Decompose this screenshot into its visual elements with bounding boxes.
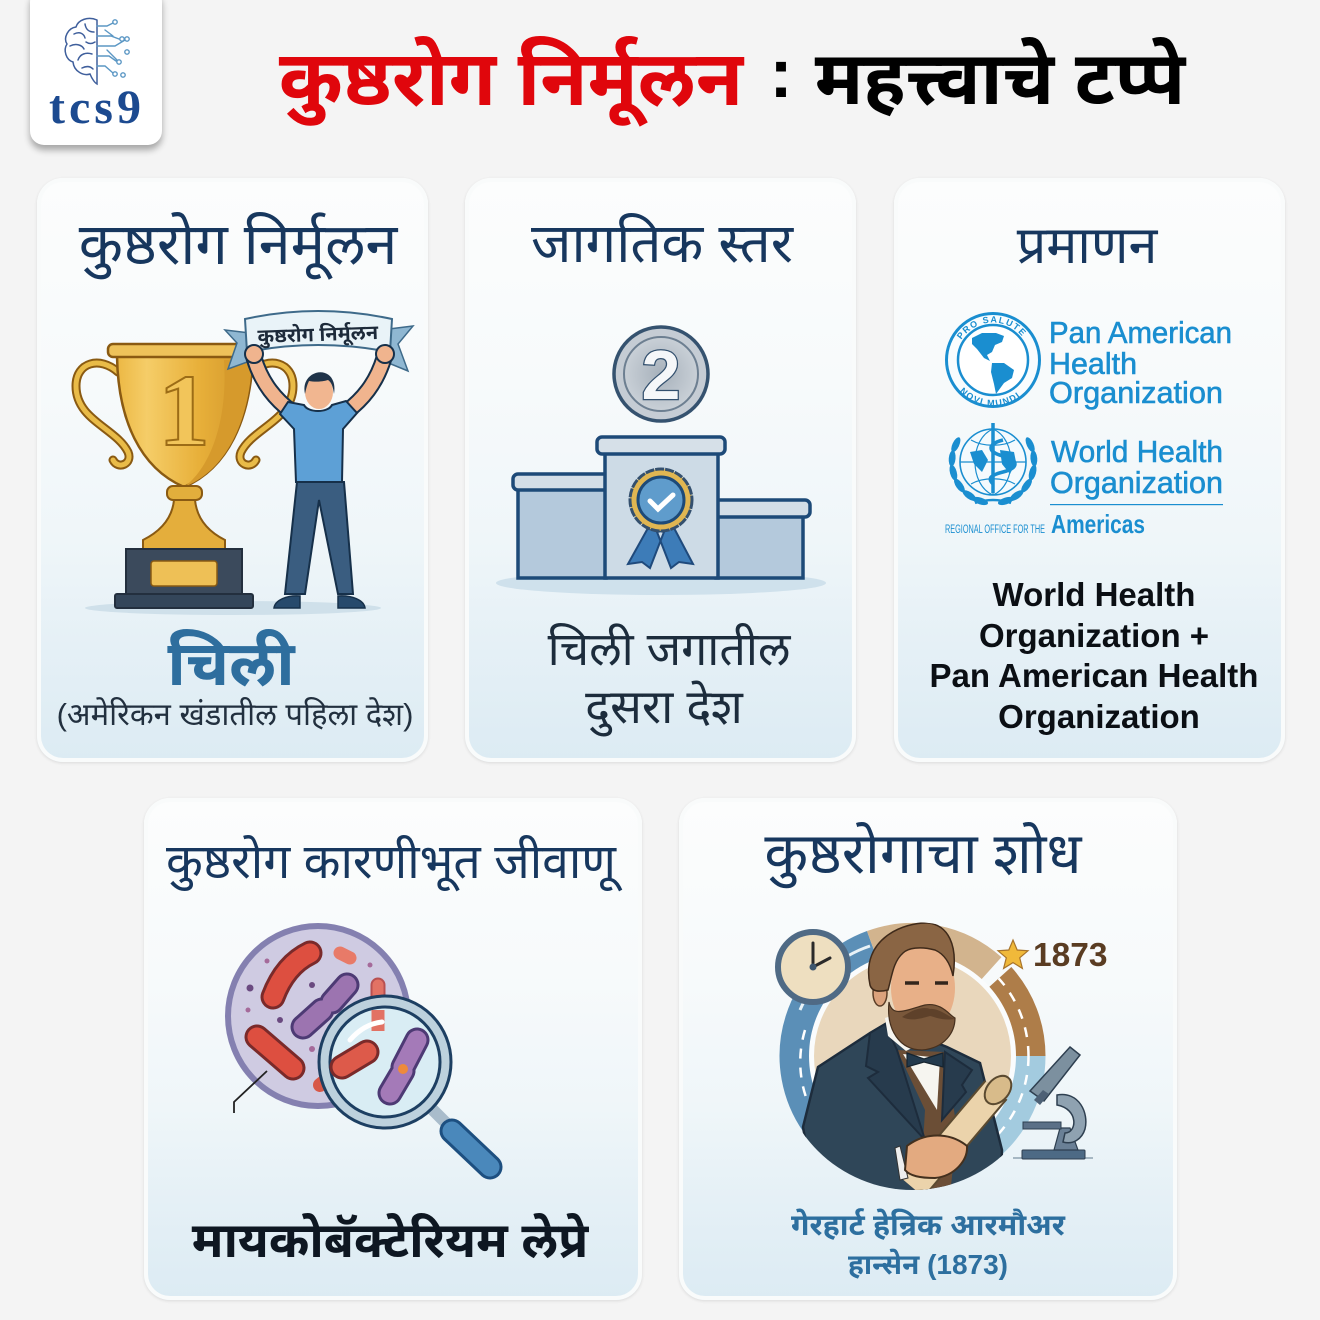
panel: certification — [894, 178, 1285, 762]
text: WHO plus PAHO: Organization + — [979, 616, 1209, 654]
PAHO emblem: PRO SALUTE — [956, 316, 1026, 340]
medal — [614, 327, 708, 421]
person — [245, 345, 394, 608]
PAHO name: Health — [1049, 346, 1137, 381]
regional office — [945, 509, 1145, 539]
WHO name: World Health — [1051, 434, 1223, 469]
panel: bacterium — [144, 798, 642, 1300]
podium — [513, 437, 810, 578]
rosette — [628, 469, 693, 568]
WHO emblem — [948, 423, 1038, 507]
heading: card 3: प्रमाणन — [1017, 217, 1157, 275]
icon: PAHO and WHO logos — [945, 312, 1232, 539]
text: Chile second: चिली जगातील — [548, 623, 790, 675]
title: : — [769, 34, 793, 112]
icon: trophy and person — [72, 310, 415, 615]
trophy: 1 — [158, 354, 210, 468]
banner — [225, 311, 413, 371]
text: WHO plus PAHO: Organization — [998, 698, 1200, 734]
medal: 2 — [642, 336, 680, 414]
PAHO name — [1049, 315, 1232, 410]
heading: card 5: कुष्ठरोगाचा शोध — [764, 822, 1082, 886]
banner: कुष्ठरोग निर्मूलन — [257, 320, 379, 349]
panel: discovery — [679, 798, 1177, 1300]
text: WHO plus PAHO: Pan American Health — [930, 657, 1258, 694]
text: second country: दुसरा देश — [585, 680, 743, 733]
PAHO emblem — [945, 312, 1041, 408]
WHO name: Organization — [1050, 465, 1223, 500]
text: WHO plus PAHO: World Health — [993, 576, 1195, 613]
text: Hansen 1873: हान्सेन (1873) — [848, 1249, 1008, 1280]
panel: global level — [465, 178, 856, 762]
logo text: tcs9 — [49, 81, 145, 134]
regional office: Americas — [1051, 509, 1145, 539]
text: first in Americas: (अमेरिकन खंडातील पहिला देश) — [57, 697, 413, 732]
text: WHO plus PAHO — [930, 576, 1258, 735]
icon: Hansen portrait with timeline — [775, 922, 1108, 1190]
logo badge — [30, 0, 162, 145]
microscope — [1013, 1047, 1093, 1159]
title: महत्त्वाचे टप्पे — [815, 37, 1185, 120]
bacteria dish — [228, 926, 408, 1113]
title — [278, 34, 1186, 127]
title: कुष्ठरोग निर्मूलन — [279, 36, 743, 122]
PAHO emblem: NOVI MUNDI — [960, 387, 1020, 405]
heading: card 4: कुष्ठरोग कारणीभूत जीवाणू — [166, 836, 616, 889]
text: Mycobacterium leprae: मायकोबॅक्टेरियम लेप्रे — [192, 1214, 588, 1268]
text: Chile: चिली — [167, 629, 295, 699]
icon: bacteria and magnifier — [225, 923, 502, 1180]
icon: brain circuit — [64, 18, 130, 86]
magnifier — [319, 996, 490, 1167]
PAHO name: Pan American — [1049, 315, 1232, 350]
year 1873 — [998, 937, 1108, 974]
Hansen figure — [803, 923, 1017, 1195]
regional office: REGIONAL OFFICE FOR THE — [945, 524, 1045, 536]
WHO name — [1050, 434, 1223, 500]
clock — [778, 932, 848, 1002]
text: Hansen name: गेरहार्ट हेन्रिक आरमौअर — [791, 1209, 1065, 1242]
panel: Chile first — [37, 178, 428, 762]
PAHO name: Organization — [1049, 375, 1223, 410]
timeline ring — [797, 940, 1028, 1157]
year 1873: 1873 — [1033, 937, 1108, 974]
icon: podium with medal — [496, 325, 826, 595]
heading: card 1: कुष्ठरोग निर्मूलन — [79, 213, 397, 277]
heading: card 2: जागतिक स्तर — [531, 213, 793, 274]
trophy — [76, 344, 293, 608]
